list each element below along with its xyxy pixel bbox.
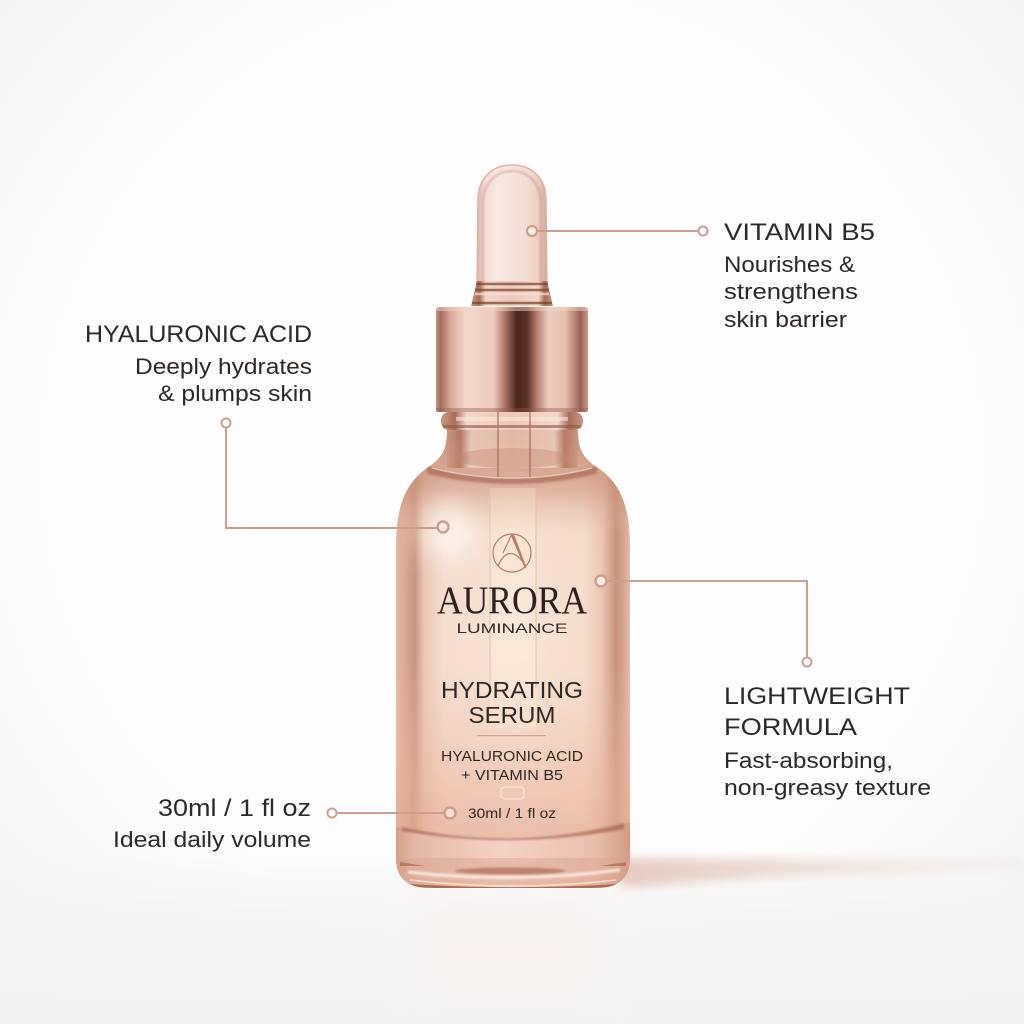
product name — [441, 677, 583, 728]
neck ring — [441, 412, 583, 430]
callout: vitamin B5: Nourishes & — [724, 252, 855, 277]
bottle volume: 30ml / 1 fl oz — [468, 805, 556, 821]
callout: volume: Ideal daily volume — [113, 827, 311, 852]
callout: lightweight formula: non-greasy texture — [724, 775, 931, 800]
callout: lightweight formula — [596, 576, 931, 800]
brand subtitle: LUMINANCE — [456, 620, 568, 636]
bottle — [396, 165, 630, 888]
connector: volume — [328, 808, 456, 818]
callout: hyaluronic acid: Deeply hydrates — [135, 354, 312, 379]
callout: lightweight formula: LIGHTWEIGHT — [724, 683, 910, 710]
callout: vitamin B5 — [527, 219, 875, 332]
product name: HYDRATING — [441, 677, 583, 703]
bottle base glass — [396, 822, 630, 888]
bottle shadow and reflection — [420, 858, 1024, 1000]
recycle mark — [501, 787, 524, 799]
callout: volume — [113, 795, 456, 852]
brand name: AURORA — [437, 579, 587, 622]
ingredients on label: + VITAMIN B5 — [461, 768, 563, 784]
logo emblem — [493, 534, 531, 572]
callout: volume: 30ml / 1 fl oz — [158, 795, 311, 822]
callout: vitamin B5: VITAMIN B5 — [724, 219, 875, 246]
callout: lightweight formula: Fast-absorbing, — [724, 748, 893, 773]
callout: vitamin B5: skin barrier — [724, 307, 847, 332]
ingredients on label — [441, 735, 583, 784]
connector: vitamin B5 — [527, 226, 708, 236]
product name: SERUM — [468, 702, 556, 728]
glass bottle body — [396, 425, 630, 888]
ingredients on label: HYALURONIC ACID — [441, 749, 583, 765]
connector: lightweight formula — [596, 576, 812, 666]
callout: vitamin B5: strengthens — [724, 279, 858, 304]
callout: hyaluronic acid — [85, 321, 448, 532]
callout: hyaluronic acid: HYALURONIC ACID — [85, 321, 312, 348]
connector: hyaluronic acid — [222, 418, 448, 532]
rose gold collar — [436, 307, 588, 412]
dropper thread — [471, 281, 553, 306]
dropper bulb — [477, 165, 547, 286]
callout: lightweight formula: FORMULA — [724, 714, 857, 741]
callout: hyaluronic acid: & plumps skin — [158, 381, 312, 406]
